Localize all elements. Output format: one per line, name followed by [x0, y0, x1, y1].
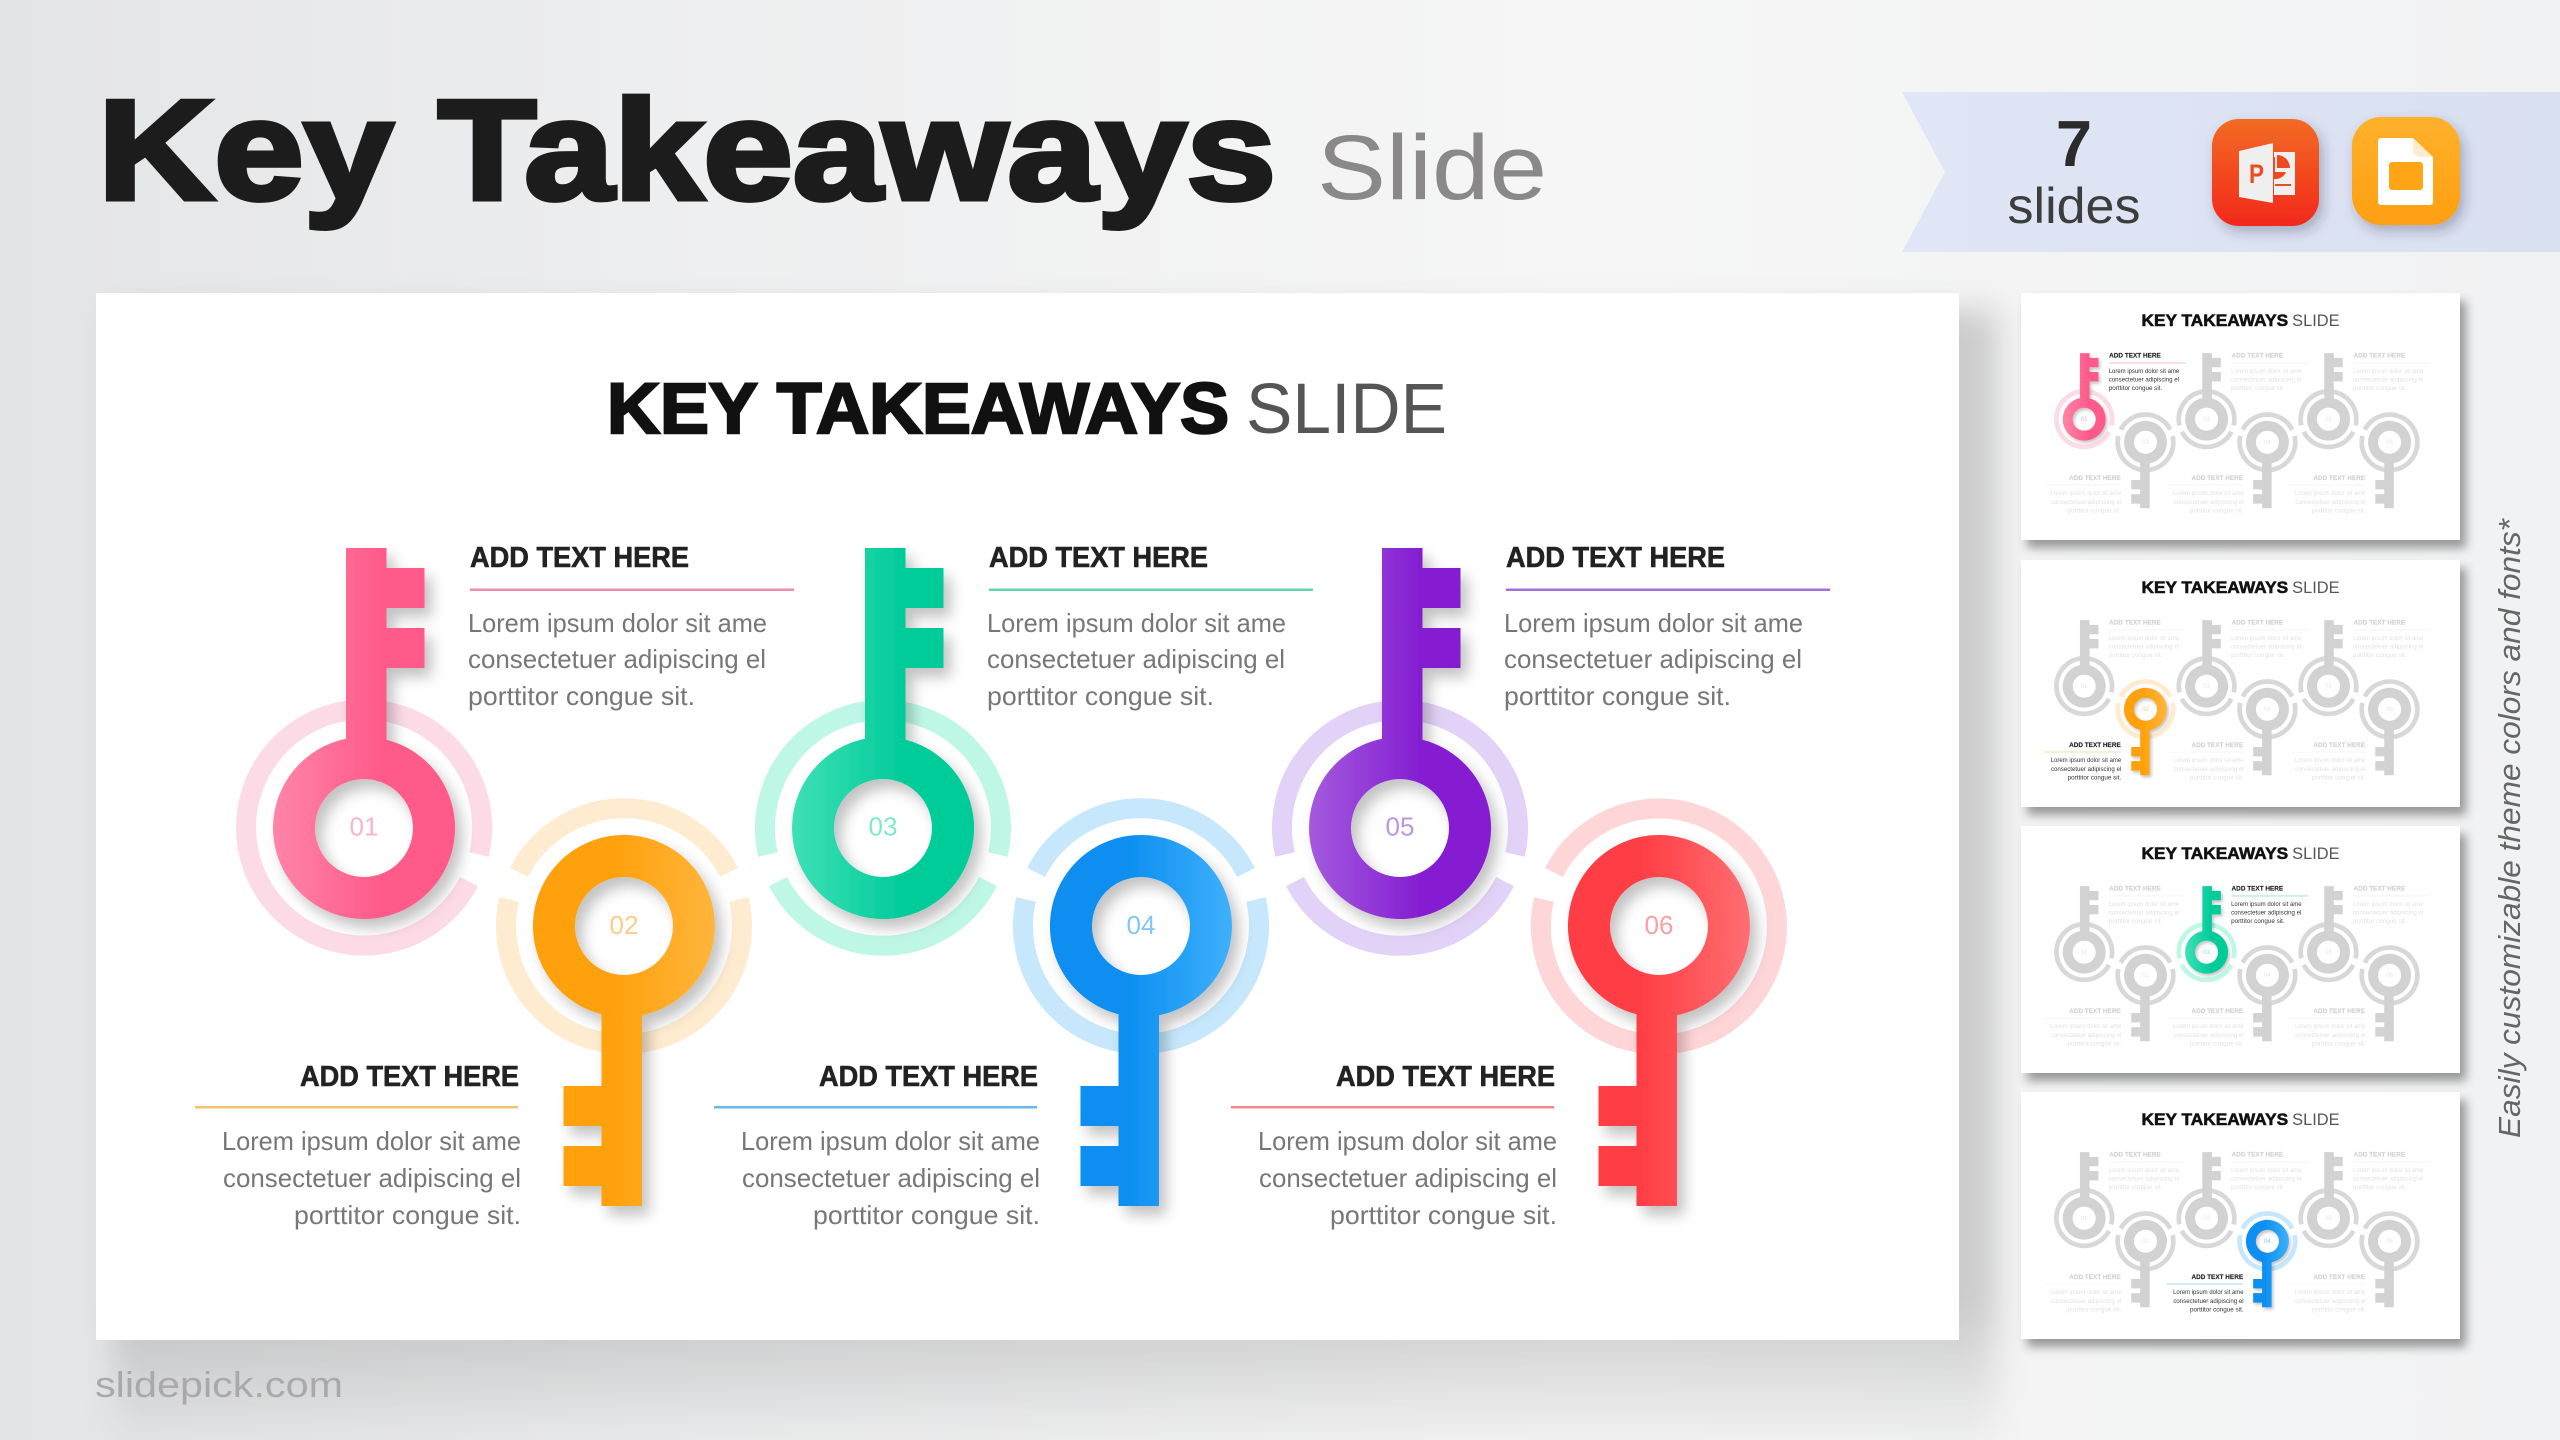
- key 05: [1309, 548, 1491, 919]
- key numbers: 02: [610, 910, 638, 940]
- thumbnail 3: green key highlighted: consectetuer adipiscing el: [2109, 909, 2179, 916]
- thumbnail 4: blue key highlighted: porttitor congue sit.: [2190, 1307, 2244, 1314]
- thumbnail 2: orange key highlighted: ADD TEXT HERE: [2353, 620, 2406, 627]
- thumbnail 4: blue key highlighted: 06: [2386, 1238, 2394, 1245]
- thumbnail 1: pink key highlighted: Lorem ipsum dolor sit ame: [2231, 368, 2302, 375]
- thumbnail 4: blue key highlighted: 02: [2142, 1238, 2149, 1245]
- thumbnail 4: blue key highlighted: SLIDE: [2292, 1110, 2340, 1129]
- text block 01: consectetuer adipiscing el: [468, 644, 766, 674]
- thumbnail 3: green key highlighted: porttitor congue sit.: [2190, 1041, 2244, 1048]
- thumbnail 1: pink key highlighted: [2021, 293, 2460, 540]
- thumbnail 4: blue key highlighted: ADD TEXT HERE: [2069, 1274, 2121, 1281]
- thumbnail 1: pink key highlighted: porttitor congue sit.: [2312, 508, 2366, 515]
- thumbnail 3: green key highlighted: ADD TEXT HERE: [2109, 886, 2161, 893]
- text block 02: Lorem ipsum dolor sit ame: [222, 1126, 521, 1156]
- key numbers: 03: [869, 812, 897, 842]
- thumbnail 2: orange key highlighted: 05: [2325, 683, 2332, 690]
- text block 02: [195, 1061, 521, 1230]
- thumbnail 3: green key highlighted: 02: [2142, 972, 2149, 979]
- thumbnail 2: orange key highlighted: Lorem ipsum dolor sit ame: [2051, 757, 2122, 764]
- thumbnail 3: green key highlighted: Lorem ipsum dolor sit ame: [2231, 901, 2302, 908]
- thumbnail 1: pink key highlighted: consectetuer adipiscing el: [2109, 376, 2179, 383]
- text block 04: [714, 1061, 1040, 1230]
- thumbnail 1: pink key highlighted: consectetuer adipiscing el: [2295, 499, 2366, 506]
- thumbnail 1: pink key highlighted: consectetuer adipiscing el: [2231, 376, 2301, 383]
- banner: slide count and app icons: [1902, 92, 2560, 252]
- icon: Google Slides: [2352, 117, 2460, 225]
- thumbnail 4: blue key highlighted: consectetuer adipiscing el: [2051, 1298, 2121, 1305]
- key 04: [1050, 835, 1232, 1206]
- thumbnail 4: blue key highlighted: consectetuer adipiscing el: [2295, 1298, 2366, 1305]
- thumbnail 2: orange key highlighted: [2021, 560, 2460, 807]
- text block 05: porttitor congue sit.: [1504, 681, 1731, 711]
- thumbnail 1: pink key highlighted: 06: [2386, 439, 2394, 446]
- thumbnail 3: green key highlighted: ADD TEXT HERE: [2353, 886, 2406, 893]
- thumbnail 1: pink key highlighted: porttitor congue sit.: [2231, 385, 2285, 392]
- thumbnail 2: orange key highlighted: 03: [2203, 683, 2211, 690]
- text block 03: [987, 542, 1313, 711]
- thumbnail 4: blue key highlighted: 05: [2325, 1215, 2332, 1222]
- thumbnail 3: green key highlighted: ADD TEXT HERE: [2069, 1008, 2121, 1015]
- thumbnail 3: green key highlighted: Lorem ipsum dolor sit ame: [2353, 901, 2424, 908]
- text block 06: consectetuer adipiscing el: [1259, 1163, 1557, 1193]
- thumbnail 1: pink key highlighted: consectetuer adipiscing el: [2353, 376, 2423, 383]
- thumbnail 3: green key highlighted: 01: [2081, 949, 2088, 956]
- thumbnail 2: orange key highlighted: consectetuer adipiscing el: [2109, 643, 2179, 650]
- thumbnail 2: orange key highlighted: ADD TEXT HERE: [2191, 742, 2244, 749]
- thumbnail 2: orange key highlighted: Lorem ipsum dolor sit ame: [2109, 635, 2180, 642]
- text block 05: ADD TEXT HERE: [1506, 542, 1725, 574]
- thumbnail 2: orange key highlighted: consectetuer adipiscing el: [2353, 643, 2423, 650]
- text block 04: ADD TEXT HERE: [819, 1061, 1038, 1093]
- key numbers: [350, 812, 1673, 940]
- page title: Key Takeaways: [98, 71, 1276, 230]
- thumbnail 1: pink key highlighted: porttitor congue sit.: [2109, 385, 2163, 392]
- slide heading: SLIDE: [1246, 370, 1447, 449]
- thumbnail 4: blue key highlighted: consectetuer adipiscing el: [2109, 1175, 2179, 1182]
- thumbnail 2: orange key highlighted: Lorem ipsum dolor sit ame: [2353, 635, 2424, 642]
- text block 06: Lorem ipsum dolor sit ame: [1258, 1126, 1557, 1156]
- thumbnail 3: green key highlighted: ADD TEXT HERE: [2232, 886, 2284, 893]
- thumbnail 3: green key highlighted: KEY TAKEAWAYS: [2141, 844, 2288, 863]
- text block 01: ADD TEXT HERE: [470, 542, 689, 574]
- thumbnail 4: blue key highlighted: porttitor congue sit.: [2109, 1184, 2163, 1191]
- thumbnail 3: green key highlighted: 05: [2325, 949, 2332, 956]
- thumbnail 4: blue key highlighted: [2021, 1092, 2460, 1339]
- thumbnail 2: orange key highlighted: Lorem ipsum dolor sit ame: [2231, 635, 2302, 642]
- thumbnail 3: green key highlighted: consectetuer adipiscing el: [2173, 1032, 2244, 1039]
- thumbnail 2: orange key highlighted: porttitor congue sit.: [2109, 652, 2163, 659]
- key 01: [273, 548, 455, 919]
- slide count: slides: [2008, 178, 2140, 234]
- slide count: [2008, 107, 2140, 234]
- thumbnail 4: blue key highlighted: porttitor congue sit.: [2068, 1307, 2122, 1314]
- thumbnail 2: orange key highlighted: 01: [2081, 683, 2088, 690]
- text block 04: consectetuer adipiscing el: [742, 1163, 1040, 1193]
- thumbnail 1: pink key highlighted: 01: [2081, 416, 2088, 423]
- thumbnail 3: green key highlighted: porttitor congue sit.: [2109, 918, 2163, 925]
- thumbnail 3: green key highlighted: porttitor congue sit.: [2231, 918, 2285, 925]
- thumbnail 1: pink key highlighted: consectetuer adipiscing el: [2173, 499, 2244, 506]
- text block 05: Lorem ipsum dolor sit ame: [1504, 608, 1803, 638]
- thumbnail 1: pink key highlighted: Lorem ipsum dolor sit ame: [2353, 368, 2424, 375]
- thumbnail 4: blue key highlighted: ADD TEXT HERE: [2191, 1274, 2244, 1281]
- thumbnail 3: green key highlighted: 06: [2386, 972, 2394, 979]
- text block 04: porttitor congue sit.: [813, 1200, 1040, 1230]
- thumbnail 2: orange key highlighted: ADD TEXT HERE: [2232, 620, 2284, 627]
- thumbnail 2: orange key highlighted: Lorem ipsum dolor sit ame: [2173, 757, 2244, 764]
- thumbnail 3: green key highlighted: consectetuer adipiscing el: [2051, 1032, 2121, 1039]
- text block 06: porttitor congue sit.: [1330, 1200, 1557, 1230]
- thumbnail 3: green key highlighted: consectetuer adipiscing el: [2295, 1032, 2366, 1039]
- thumbnail 3: green key highlighted: porttitor congue sit.: [2068, 1041, 2122, 1048]
- main slide panel: [96, 293, 1959, 1340]
- thumbnail 2: orange key highlighted: ADD TEXT HERE: [2109, 620, 2161, 627]
- slide heading: KEY TAKEAWAYS: [607, 370, 1229, 449]
- thumbnail 3: green key highlighted: Lorem ipsum dolor sit ame: [2295, 1023, 2366, 1030]
- thumbnail 2: orange key highlighted: Lorem ipsum dolor sit ame: [2295, 757, 2366, 764]
- thumbnail 3: green key highlighted: SLIDE: [2292, 844, 2340, 863]
- key numbers: 05: [1386, 812, 1414, 842]
- text block 02: ADD TEXT HERE: [300, 1061, 519, 1093]
- thumbnail 1: pink key highlighted: ADD TEXT HERE: [2069, 475, 2121, 482]
- thumbnail 4: blue key highlighted: Lorem ipsum dolor sit ame: [2295, 1289, 2366, 1296]
- thumbnail 2: orange key highlighted: SLIDE: [2292, 578, 2340, 597]
- icon: PowerPoint: [2212, 119, 2319, 226]
- thumbnail 2: orange key highlighted: porttitor congue sit.: [2231, 652, 2285, 659]
- page title: Slide: [1317, 117, 1547, 219]
- text block 01: Lorem ipsum dolor sit ame: [468, 608, 767, 638]
- thumbnail 1: pink key highlighted: KEY TAKEAWAYS: [2141, 311, 2288, 330]
- thumbnail 3: green key highlighted: consectetuer adipiscing el: [2353, 909, 2423, 916]
- thumbnail 1: pink key highlighted: SLIDE: [2292, 311, 2340, 330]
- thumbnail 3: green key highlighted: ADD TEXT HERE: [2313, 1008, 2365, 1015]
- text block 02: porttitor congue sit.: [294, 1200, 521, 1230]
- thumbnail 4: blue key highlighted: porttitor congue sit.: [2312, 1307, 2366, 1314]
- thumbnail 4: blue key highlighted: KEY TAKEAWAYS: [2141, 1110, 2288, 1129]
- thumbnail 4: blue key highlighted: porttitor congue sit.: [2231, 1184, 2285, 1191]
- text block 04: Lorem ipsum dolor sit ame: [741, 1126, 1040, 1156]
- vertical caption: Easily customizable theme colors and fonts*: [2492, 518, 2527, 1138]
- thumbnail 4: blue key highlighted: ADD TEXT HERE: [2353, 1152, 2406, 1159]
- thumbnail 4: blue key highlighted: ADD TEXT HERE: [2313, 1274, 2365, 1281]
- thumbnail 3: green key highlighted: 03: [2203, 949, 2211, 956]
- thumbnail 2: orange key highlighted: consectetuer adipiscing el: [2295, 766, 2366, 773]
- text block 01: [468, 542, 794, 711]
- thumbnail 4: blue key highlighted: 04: [2264, 1238, 2271, 1245]
- icon: PowerPoint: P: [2249, 159, 2264, 189]
- thumbnail 4: blue key highlighted: Lorem ipsum dolor sit ame: [2231, 1167, 2302, 1174]
- thumbnail 2: orange key highlighted: consectetuer adipiscing el: [2231, 643, 2301, 650]
- thumbnail 2: orange key highlighted: porttitor congue sit.: [2312, 775, 2366, 782]
- text block 03: consectetuer adipiscing el: [987, 644, 1285, 674]
- rings: [246, 710, 1777, 1044]
- thumbnail 4: blue key highlighted: Lorem ipsum dolor sit ame: [2173, 1289, 2244, 1296]
- thumbnail 2: orange key highlighted: 02: [2142, 706, 2149, 713]
- thumbnail 3: green key highlighted: [2021, 826, 2460, 1073]
- thumbnail 4: blue key highlighted: consectetuer adipiscing el: [2353, 1175, 2423, 1182]
- thumbnail 4: blue key highlighted: porttitor congue sit.: [2353, 1184, 2407, 1191]
- key 02: [533, 835, 715, 1206]
- thumbnail 2: orange key highlighted: 06: [2386, 706, 2394, 713]
- thumbnail 1: pink key highlighted: ADD TEXT HERE: [2313, 475, 2365, 482]
- thumbnail 4: blue key highlighted: ADD TEXT HERE: [2232, 1152, 2284, 1159]
- thumbnail 4: blue key highlighted: 03: [2203, 1215, 2211, 1222]
- key 03: [792, 548, 974, 919]
- thumbnail 3: green key highlighted: Lorem ipsum dolor sit ame: [2173, 1023, 2244, 1030]
- thumbnail 2: orange key highlighted: ADD TEXT HERE: [2069, 742, 2121, 749]
- thumbnail 1: pink key highlighted: Lorem ipsum dolor sit ame: [2295, 490, 2366, 497]
- text block 03: porttitor congue sit.: [987, 681, 1214, 711]
- thumbnail 4: blue key highlighted: Lorem ipsum dolor sit ame: [2051, 1289, 2122, 1296]
- thumbnail 2: orange key highlighted: consectetuer adipiscing el: [2051, 766, 2121, 773]
- thumbnail 2: orange key highlighted: porttitor congue sit.: [2068, 775, 2122, 782]
- thumbnail 4: blue key highlighted: ADD TEXT HERE: [2109, 1152, 2161, 1159]
- thumbnail 1: pink key highlighted: 03: [2203, 416, 2211, 423]
- thumbnail 3: green key highlighted: consectetuer adipiscing el: [2231, 909, 2301, 916]
- slide count: 7: [2056, 107, 2092, 180]
- text block 01: porttitor congue sit.: [468, 681, 695, 711]
- thumbnail 4: blue key highlighted: consectetuer adipiscing el: [2173, 1298, 2244, 1305]
- thumbnail 1: pink key highlighted: ADD TEXT HERE: [2191, 475, 2244, 482]
- website credit: slidepick.com: [95, 1364, 343, 1405]
- text block 03: ADD TEXT HERE: [989, 542, 1208, 574]
- thumbnail 1: pink key highlighted: 04: [2264, 439, 2271, 446]
- thumbnail 1: pink key highlighted: Lorem ipsum dolor sit ame: [2051, 490, 2122, 497]
- thumbnail 3: green key highlighted: Lorem ipsum dolor sit ame: [2109, 901, 2180, 908]
- thumbnail 3: green key highlighted: 04: [2264, 972, 2271, 979]
- key numbers: 06: [1645, 910, 1673, 940]
- thumbnail 2: orange key highlighted: KEY TAKEAWAYS: [2141, 578, 2288, 597]
- thumbnail 3: green key highlighted: porttitor congue sit.: [2353, 918, 2407, 925]
- thumbnail 1: pink key highlighted: 02: [2142, 439, 2149, 446]
- key numbers: 04: [1127, 910, 1155, 940]
- text block 06: [1231, 1061, 1557, 1230]
- thumbnail 1: pink key highlighted: ADD TEXT HERE: [2109, 353, 2161, 360]
- thumbnail 4: blue key highlighted: 01: [2081, 1215, 2088, 1222]
- thumbnail 2: orange key highlighted: consectetuer adipiscing el: [2173, 766, 2244, 773]
- text block 05: consectetuer adipiscing el: [1504, 644, 1802, 674]
- thumbnail 1: pink key highlighted: 05: [2325, 416, 2332, 423]
- thumbnail 3: green key highlighted: Lorem ipsum dolor sit ame: [2051, 1023, 2122, 1030]
- thumbnail 1: pink key highlighted: consectetuer adipiscing el: [2051, 499, 2121, 506]
- thumbnail 4: blue key highlighted: consectetuer adipiscing el: [2231, 1175, 2301, 1182]
- thumbnail 4: blue key highlighted: Lorem ipsum dolor sit ame: [2353, 1167, 2424, 1174]
- thumbnail 1: pink key highlighted: Lorem ipsum dolor sit ame: [2173, 490, 2244, 497]
- text block 03: Lorem ipsum dolor sit ame: [987, 608, 1286, 638]
- thumbnail 2: orange key highlighted: porttitor congue sit.: [2190, 775, 2244, 782]
- key numbers: 01: [350, 812, 378, 842]
- thumbnail 4: blue key highlighted: Lorem ipsum dolor sit ame: [2109, 1167, 2180, 1174]
- thumbnail 2: orange key highlighted: ADD TEXT HERE: [2313, 742, 2365, 749]
- text block 02: consectetuer adipiscing el: [223, 1163, 521, 1193]
- thumbnail 1: pink key highlighted: ADD TEXT HERE: [2232, 353, 2284, 360]
- thumbnail 1: pink key highlighted: porttitor congue sit.: [2190, 508, 2244, 515]
- thumbnail 1: pink key highlighted: ADD TEXT HERE: [2353, 353, 2406, 360]
- thumbnail 1: pink key highlighted: porttitor congue sit.: [2353, 385, 2407, 392]
- text block 06: ADD TEXT HERE: [1336, 1061, 1555, 1093]
- thumbnail 1: pink key highlighted: Lorem ipsum dolor sit ame: [2109, 368, 2180, 375]
- thumbnail 2: orange key highlighted: porttitor congue sit.: [2353, 652, 2407, 659]
- thumbnail 3: green key highlighted: ADD TEXT HERE: [2191, 1008, 2244, 1015]
- key 06: [1568, 835, 1750, 1206]
- thumbnail 2: orange key highlighted: 04: [2264, 706, 2271, 713]
- thumbnail 3: green key highlighted: porttitor congue sit.: [2312, 1041, 2366, 1048]
- thumbnail 1: pink key highlighted: porttitor congue sit.: [2068, 508, 2122, 515]
- main slide shadow: [112, 310, 1997, 1440]
- text block 05: [1504, 542, 1830, 711]
